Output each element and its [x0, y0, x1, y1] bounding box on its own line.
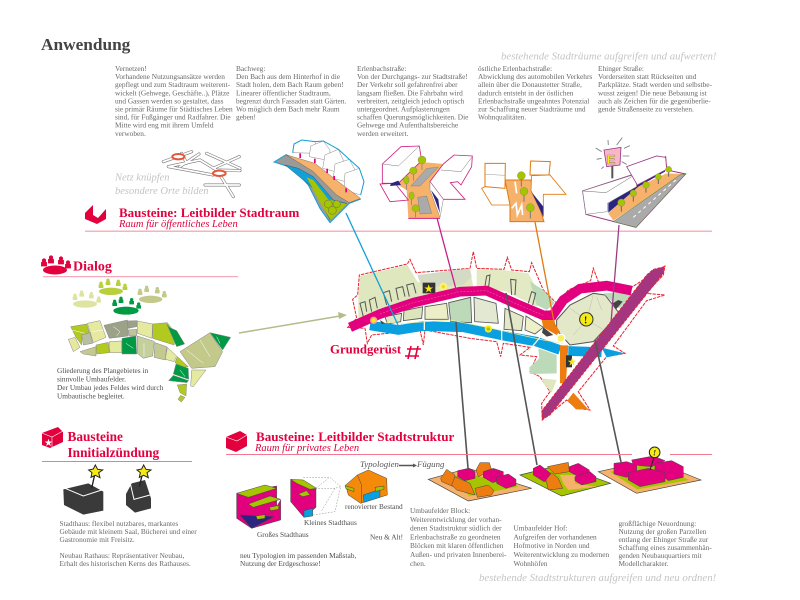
- text block: östliche Erlenbachstraße: Erlenbachstraße ungeahntes Potenzial: [478, 96, 589, 105]
- text block: Erlenbachstraße: schaffen Querungsmöglichkeiten. Die: [357, 113, 468, 122]
- markers: [370, 317, 377, 324]
- text block: Erlenbachstraße: Gehwege und Aufenthaltsbereiche: [357, 121, 458, 130]
- text block: Umbaufelder Block: chen.: [410, 559, 426, 568]
- text block: Bachweg: Linearer öffentlicher Stadtraum,: [236, 88, 331, 97]
- label: Typologien to Fügung: [360, 459, 445, 469]
- icon: round tables: [73, 279, 167, 315]
- arrow: Dialog to framework: [239, 312, 347, 333]
- text block: Umbaufelder Hof: Umbaufelder Hof:: [514, 524, 568, 532]
- text block: Vernetzen: sie primär Räume für Städtisches Leben: [115, 104, 233, 114]
- text block: östliche Erlenbachstraße: zur Schaffung neuer Stadträume und: [478, 104, 586, 114]
- icon: open cube Stadtraum: [85, 205, 106, 224]
- text block: Stadthaus: Gastronomie mit Freisitz.: [60, 535, 135, 544]
- heading: Leitbilder Stadtraum: Bausteine: Leitbilder Stadtraum: [119, 205, 299, 220]
- label: Typologien to Fügung: Typologien: [360, 459, 400, 469]
- text block: Umbaufelder Block: denen Stadtstruktur südlich der: [410, 524, 502, 532]
- purple Ehinger band: [542, 267, 664, 419]
- text block: östliche Erlenbachstraße: allein über die Donaustetter Straße,: [478, 80, 582, 89]
- text block: Bachweg: geben!: [236, 113, 256, 122]
- text block: Ehinger Straße: auch als Zeichen für die gegenüberlie-: [598, 96, 711, 105]
- map: Grundgerüst framework plan: [348, 252, 665, 420]
- text block: Stadthaus: Erhalt des historischen Kerns des Rathauses.: [60, 559, 191, 568]
- text block: Stadthaus: Neubau Rathaus: Repräsentativer Neubau,: [60, 551, 184, 560]
- icon: Stadthaus and Rathaus with sparks: [63, 465, 151, 515]
- labels: typology names: Kleines Stadthaus: [304, 518, 357, 527]
- heading: Bausteine Innitialzündung: Innitialzündung: [68, 445, 160, 460]
- map: Grundgerüst framework plan: !: [584, 315, 587, 326]
- text block: Vernetzen: und Gassen werden so gestaltet, dass: [115, 96, 224, 105]
- text block: Stadthaus: Stadthaus: flexibel nutzbares, markantes: [60, 519, 178, 528]
- text block: neu Typologien: neu Typologien im passenden Maßstab,: [240, 551, 356, 560]
- heading: Leitbilder Stadtstruktur: Bausteine: Leitbilder Stadtstruktur: [256, 429, 455, 444]
- label: Netz knüpfen: Netz knüpfen: [114, 172, 170, 184]
- text block: Umbaufelder Hof: Weiterentwicklung zu modernen: [514, 550, 609, 559]
- text block: Dialog: sinnvolle Umbaufelder.: [57, 374, 126, 384]
- blue stream: [370, 325, 602, 352]
- text block: östliche Erlenbachstraße: östliche Erlenbachstraße:: [478, 64, 552, 73]
- text block: Vernetzen: wickelt (Gehwege, Geschäfte..), Plätze: [115, 88, 229, 97]
- text block: Vernetzen: sind, für Fußgänger und Radfahrer. Die: [115, 113, 231, 122]
- blocks north: [358, 265, 473, 318]
- icon: Kleines Stadthaus: [291, 479, 317, 517]
- icon: Neuordnung perspective: !: [653, 449, 656, 458]
- icon: street network: [163, 152, 240, 197]
- text block: Dialog: Gliederung des Plangebietes in: [57, 366, 148, 375]
- icon: Ehinger Straße perspective: [583, 138, 686, 227]
- heading: Dialog: Dialog: [73, 260, 112, 274]
- connector lines to icons: [346, 213, 621, 468]
- text block: Ehinger Straße: gende Straßenseite zu verstehen.: [598, 104, 694, 114]
- text block: Vernetzen: gepflegt und zum Stadtraum weiterent-: [115, 80, 231, 89]
- text block: Vernetzen: Vernetzen!: [115, 64, 147, 73]
- text block: Vernetzen: Mitte wird eng mit ihrem Umfeld: [115, 121, 214, 130]
- text block: Umbaufelder Block: Umbaufelder Block:: [410, 506, 470, 515]
- text block: östliche Erlenbachstraße: Abwicklung des automobilen Verkehrs: [478, 72, 592, 81]
- text block: großflächige Neuordnung: großflächige Neuordnung:: [618, 519, 696, 528]
- icon: hash grid: [405, 346, 421, 359]
- text block: Erlenbachstraße: Der Verkehr soll gefahrenfrei aber: [357, 80, 458, 89]
- labels: typology names: [257, 502, 403, 542]
- text block: Umbaufelder Hof: Wohnhöfen: [514, 559, 548, 568]
- icon: Initialzündung cube with star: [42, 427, 63, 449]
- text block: Bachweg: Den Bach aus dem Hinterhof in die: [236, 72, 340, 81]
- icons: building typologies: [237, 470, 387, 528]
- text block: Vernetzen: verwoben.: [115, 129, 146, 138]
- labels: typology names: Neu & Alt!: [370, 532, 403, 542]
- text block: Erlenbachstraße: werden erweitert.: [357, 129, 409, 138]
- icon: Ehinger Straße perspective: E: [607, 152, 616, 167]
- text block: neu Typologien: Nutzung der Erdgeschosse!: [240, 559, 321, 568]
- text block: großflächige Neuordnung: Nutzung der großen Parzellen: [618, 527, 707, 536]
- title: Anwendung: [41, 35, 131, 54]
- text block: Erlenbachstraße: untergeordnet. Aufplasterungen: [357, 104, 450, 114]
- pink boulevard: [350, 286, 632, 327]
- text block: Ehinger Straße: Vorderseiten statt Rückseiten und: [598, 72, 697, 81]
- orange streets: [542, 320, 560, 335]
- text block: Dialog: Der Umbau jedes Feldes wird durch: [57, 383, 164, 392]
- text block: Erlenbachstraße: langsam fließen. Die Fahrbahn wird: [357, 88, 463, 97]
- text block: Ehinger Straße: Ehinger Straße:: [598, 64, 644, 73]
- icon: Block perspective: [428, 463, 532, 501]
- label: Grundgerüst: Grundgerüst: [330, 342, 402, 356]
- text block: großflächige Neuordnung: Modellcharakter.: [618, 559, 669, 568]
- text block: Umbaufelder Block: Weiterentwicklung der vorhan-: [410, 515, 502, 524]
- text block: Bachweg: Stadt holen, dem Bach Raum geben!: [236, 80, 344, 89]
- icon: cube Stadtstruktur: [226, 431, 247, 452]
- text block: Stadthaus: Gebäude mit kleinem Saal, Bücherei und einer: [60, 527, 197, 536]
- text block: östliche Erlenbachstraße: Wohnqualitäten.: [478, 113, 526, 122]
- text block: großflächige Neuordnung: Schaffung eines zusammenhän-: [618, 543, 712, 552]
- tagline: urban spaces: bestehende Stadträume aufgreifen und aufwerten!: [501, 50, 717, 62]
- text block: Vernetzen: Vorhandene Nutzungsansätze werden: [115, 72, 225, 81]
- text block: Umbaufelder Hof: Hofmotive in Norden und: [514, 541, 590, 550]
- map: Umbaufelder division: [68, 320, 231, 402]
- labels: typology names: renovierter Bestand: [345, 502, 403, 511]
- text block: großflächige Neuordnung: genden Neubauquartiers mit: [618, 551, 702, 560]
- text block: Erlenbachstraße: verbreitert, zeitgleich jedoch optisch: [357, 96, 465, 105]
- text block: Erlenbachstraße: Erlenbachstraße:: [357, 64, 406, 73]
- heading: Bausteine Innitialzündung: Bausteine: [68, 429, 123, 444]
- blocks south: [385, 313, 402, 324]
- text block: Bachweg: Bachweg:: [236, 64, 265, 73]
- text block: Bachweg: begrenzt durch Fassaden statt Gärten.: [236, 96, 346, 105]
- map outline: [348, 252, 665, 420]
- text block: großflächige Neuordnung: entlang der Ehinger Straße zur: [618, 535, 709, 544]
- text block: Dialog: Umbautische begleitet.: [57, 392, 125, 400]
- icon: Hof perspective: [520, 462, 611, 496]
- map: Grundgerüst framework plan: ★: [567, 355, 577, 368]
- label: Typologien to Fügung: Fügung: [416, 459, 445, 469]
- icon: Großes Stadthaus: [237, 485, 281, 528]
- text block: Ehinger Straße: wusst zeigen! Die neue Bebauung ist: [598, 88, 707, 97]
- icon: Bachweg perspective: [274, 140, 364, 223]
- text block: östliche Erlenbachstraße: dadurch entsteht in der östlichen: [478, 88, 574, 97]
- map: Grundgerüst framework plan: ★: [424, 282, 434, 296]
- text block: Umbaufelder Block: Außen- und privaten Innenberei-: [410, 550, 507, 559]
- text block: Bachweg: Wo möglich dem Bach mehr Raum: [236, 104, 340, 114]
- icon: Initialzündung cube with star: ★: [44, 438, 53, 449]
- icon: renovierter Bestand: [345, 470, 387, 503]
- text block: Ehinger Straße: Parkplätze. Stadt werden und selbstbe-: [598, 80, 713, 89]
- subheading: Raum für privates Leben: Raum für privates Leben: [254, 443, 359, 454]
- text block: Umbaufelder Block: Erlenbachstraße zu geordneten: [410, 532, 501, 542]
- label: Netz knüpfen: besondere Orte bilden: [115, 186, 209, 197]
- icon: Erlenbachstraße perspective: [380, 146, 472, 218]
- icon: Dialog people: [41, 255, 71, 274]
- icon: östliche Erlenbachstraße perspective: [482, 161, 566, 222]
- text block: Erlenbachstraße: Von der Durchgangs- zur Stadtstraße!: [357, 72, 468, 81]
- text block: Umbaufelder Block: Blöcken mit klaren öffentlichen: [410, 541, 504, 550]
- east block: [557, 293, 619, 345]
- subheading: Raum für öffentliches Leben: Raum für öffentliches Leben: [118, 219, 238, 230]
- labels: typology names: Großes Stadthaus: [257, 530, 309, 539]
- icon: Neuordnung perspective: [598, 447, 701, 493]
- text block: Umbaufelder Hof: Aufgreifen der vorhandenen: [514, 532, 597, 542]
- tagline: urban structures: bestehende Stadtstrukturen aufgreifen und neu ordnen!: [479, 572, 717, 584]
